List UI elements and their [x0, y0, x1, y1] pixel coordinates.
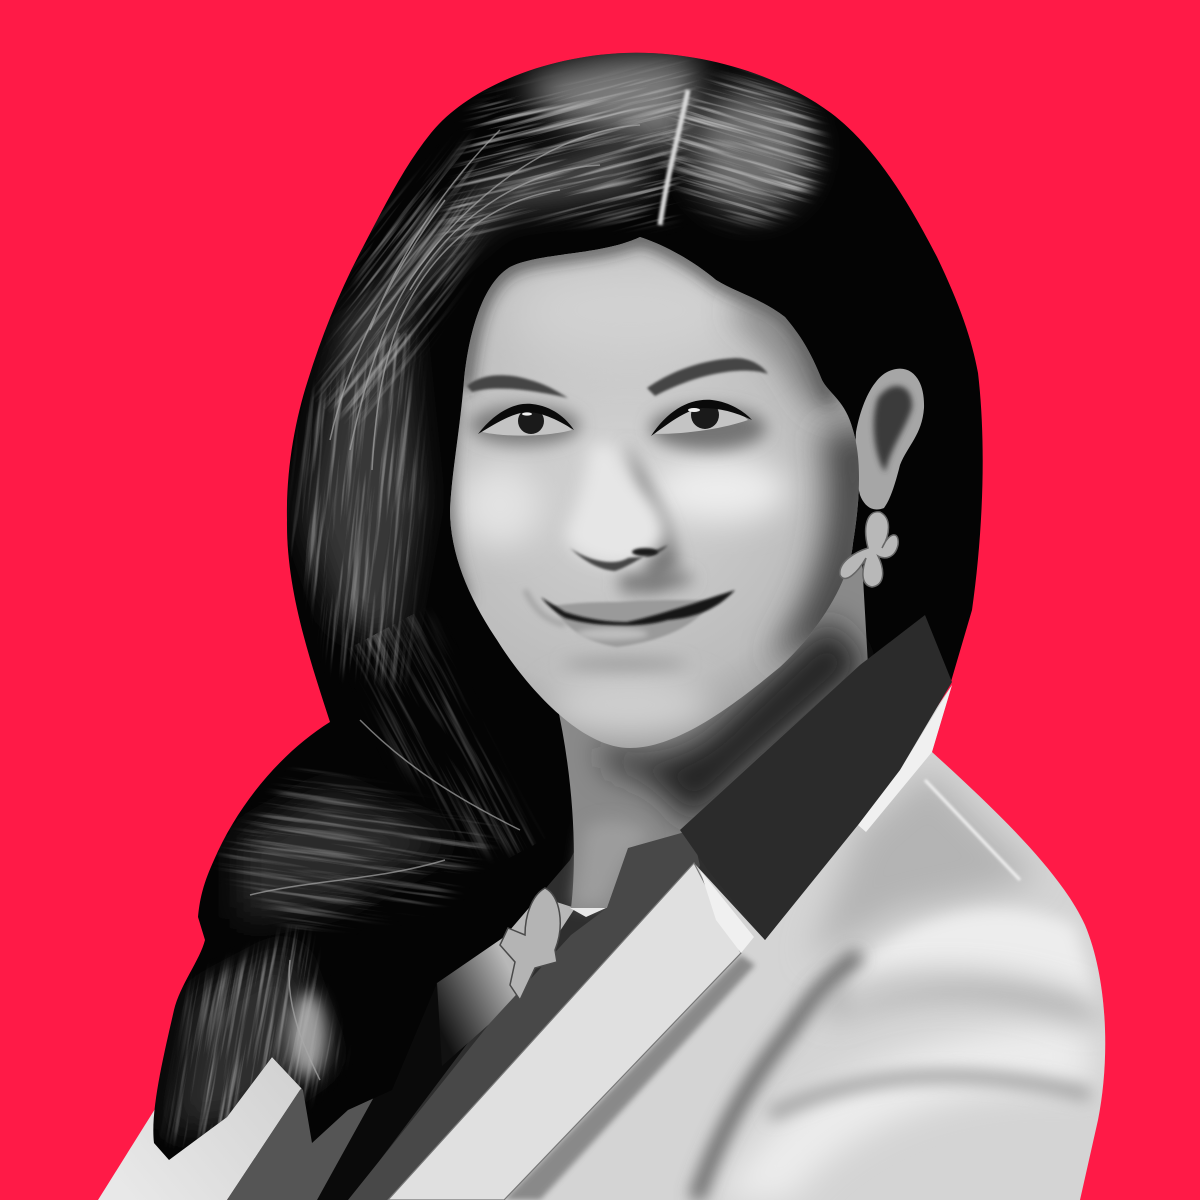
right eye — [651, 400, 752, 436]
loose strands — [250, 125, 640, 1080]
shirt — [348, 830, 700, 1200]
strand texture: left side — [292, 332, 426, 686]
hair part — [660, 90, 688, 225]
hair — [124, 0, 983, 1181]
dark collar — [680, 615, 952, 940]
dark inner garment, left — [227, 975, 460, 1200]
lapel cast shadow — [504, 955, 755, 1200]
strand texture: by the neck — [348, 614, 534, 857]
shoulder highlight — [850, 909, 1100, 1010]
upper jacket shade — [810, 770, 1040, 960]
sleeve highlight — [720, 1020, 1090, 1200]
left eye socket — [470, 405, 580, 445]
mouth — [541, 590, 735, 647]
white edge along collar — [858, 685, 952, 832]
white seam — [925, 780, 1020, 880]
brooch — [500, 888, 560, 1000]
forehead tone — [500, 255, 760, 365]
ear — [855, 369, 924, 509]
strand texture: crown right — [663, 70, 831, 229]
left cheek highlight — [458, 463, 542, 547]
shadow beneath nose — [620, 571, 695, 593]
lower sleeve fold — [770, 1076, 1090, 1115]
jacket — [504, 685, 1106, 1200]
right eye socket — [650, 406, 766, 450]
chest skin — [437, 895, 575, 1066]
sleeve seam shadow — [696, 955, 860, 1200]
nose side shadow — [625, 440, 680, 590]
left face edge shade — [440, 400, 470, 600]
jacket lapel — [388, 863, 754, 1200]
left eye — [478, 404, 574, 436]
torso underlay — [227, 820, 800, 1200]
upper sleeve fold — [825, 984, 1095, 1015]
smile crease — [525, 590, 565, 625]
right cheek highlight — [652, 458, 788, 522]
right eyebrow — [647, 358, 768, 396]
strand texture: lower bend — [218, 768, 494, 931]
strand texture: left temple — [314, 136, 483, 424]
black jacket edge strip — [317, 983, 470, 1200]
left eyebrow — [467, 375, 568, 398]
under lip shade — [563, 658, 687, 670]
neck — [556, 560, 868, 917]
forehead right shadow — [735, 300, 850, 420]
right side shadow — [770, 430, 885, 660]
chin tone — [550, 677, 710, 733]
hairline softening — [464, 237, 830, 400]
nose — [565, 445, 668, 571]
left jacket panel — [98, 1040, 320, 1200]
strand texture: crown left — [436, 62, 697, 246]
face — [440, 237, 885, 748]
strand texture: lock — [166, 928, 341, 1145]
earring — [840, 512, 898, 587]
hair sheen masses — [170, 56, 808, 1130]
